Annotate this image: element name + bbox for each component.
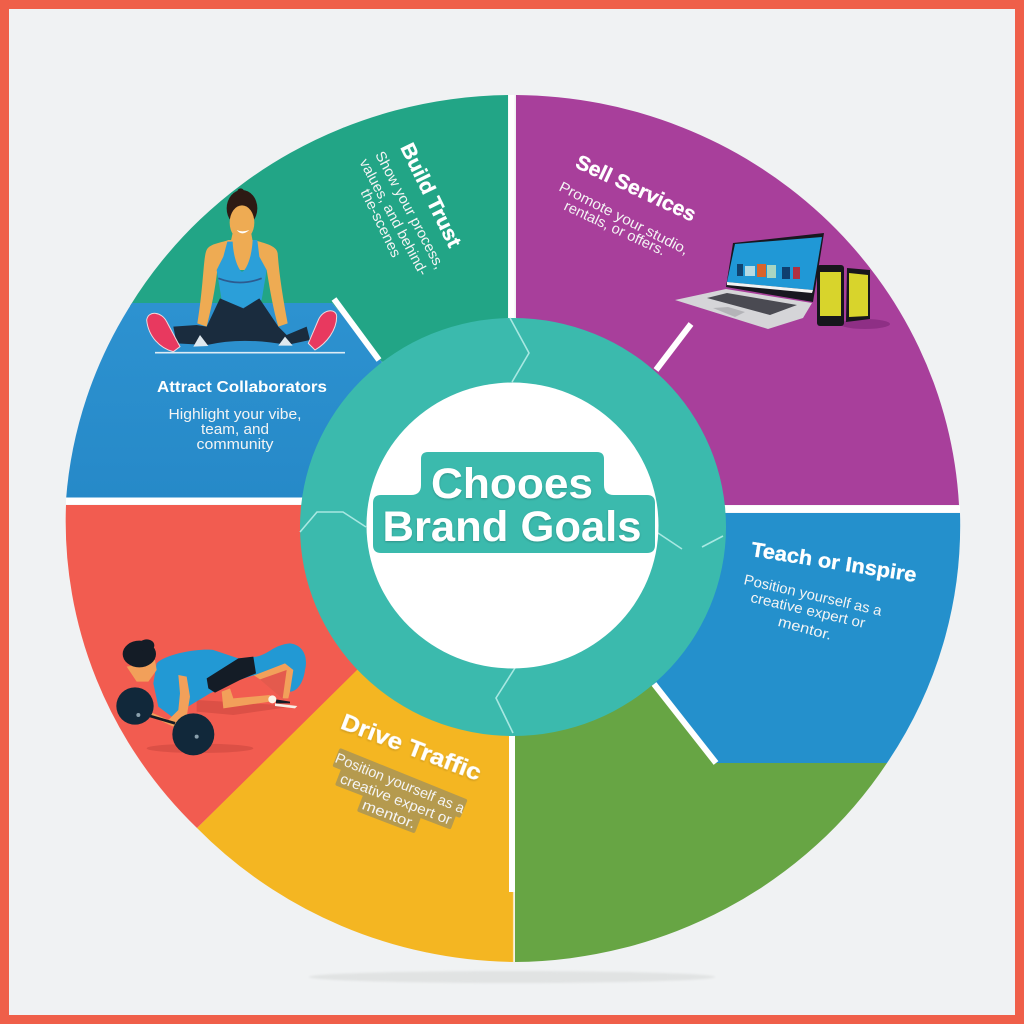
panel: Build Trust <box>130 95 508 362</box>
panel: green segment <box>515 684 887 962</box>
panel: red segment <box>66 505 362 828</box>
description: Attract Collaborators <box>168 407 302 453</box>
description: Attract Collaborators: team, and <box>201 422 269 438</box>
description: Teach or Inspire <box>742 572 884 644</box>
title <box>373 452 655 553</box>
description: Attract Collaborators: community <box>196 437 274 453</box>
description: Drive Traffic: Position yourself as a <box>333 751 467 818</box>
heading: Attract Collaborators: Attract Collaborators <box>157 379 327 396</box>
description: Teach or Inspire: mentor. <box>776 614 833 644</box>
ring seams <box>300 318 723 733</box>
heading: Teach or Inspire: Teach or Inspire <box>750 538 918 587</box>
description: Teach or Inspire: Position yourself as a <box>742 572 884 620</box>
description: Sell Services: rentals, or offers. <box>561 198 668 259</box>
divider lines <box>66 95 960 962</box>
heading: Sell Services: Sell Services <box>572 151 700 226</box>
description: Build Trust: values, and behind- <box>356 156 431 279</box>
heading: Build Trust: Build Trust <box>395 139 466 251</box>
description: Drive Traffic: creative expert or <box>338 771 454 829</box>
description: Sell Services: Promote your studio, <box>556 179 691 258</box>
description: Teach or Inspire: creative expert or <box>749 590 867 632</box>
title: Chooes <box>431 460 593 508</box>
panel: Teach or Inspire <box>652 513 960 763</box>
description background <box>332 748 468 834</box>
description: Attract Collaborators: Highlight your vibe, <box>168 407 302 423</box>
description: Build Trust: the-scenes <box>357 187 404 260</box>
panel: Sell Services <box>516 95 959 505</box>
description: Build Trust: Show your process, <box>371 149 447 272</box>
description: Drive Traffic: mentor. <box>360 797 418 832</box>
icon: seated stretching woman <box>147 188 345 353</box>
icon: push-up man with barbell <box>116 639 306 755</box>
heading: Drive Traffic: Drive Traffic <box>338 708 485 786</box>
central ring <box>300 318 726 736</box>
panel: Attract Collaborators <box>66 188 382 500</box>
icon: laptop and phones <box>675 233 890 329</box>
ground shadow <box>309 971 715 983</box>
panel: Drive Traffic <box>197 665 513 962</box>
title: Brand Goals <box>382 503 642 551</box>
